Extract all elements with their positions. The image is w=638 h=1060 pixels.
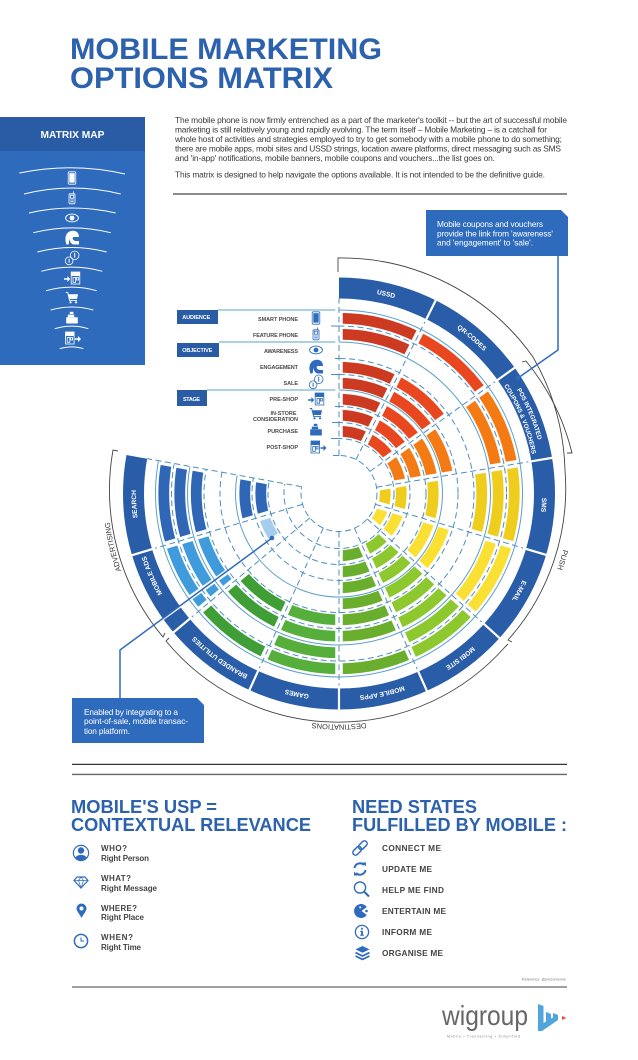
intro text block: whole host of activities and strategies employed to try to get somebody with a mobile phone to do something; <box>174 134 562 144</box>
item: what: WHAT? <box>101 874 131 883</box>
intro text block: marketing is still relatively young and rapidly evolving. The term itself – Mobile Marketing – is a catchall for <box>175 124 547 134</box>
item: connect: CONNECT ME <box>382 843 441 853</box>
item: where: WHERE? <box>101 904 137 913</box>
legend box: audience <box>177 310 218 324</box>
legend: row labels: FEATURE PHONE <box>253 333 298 339</box>
bars: small integrated pieces <box>164 318 514 669</box>
group brackets <box>109 258 572 722</box>
callout: coupons <box>426 210 568 380</box>
legend: row labels <box>253 317 299 451</box>
band label: mobi site: MOBI SITE <box>446 646 476 670</box>
callout text: and 'engagement' to 'sale'. <box>437 238 533 248</box>
panel: matrix map <box>0 117 145 365</box>
legend: row icons <box>308 312 326 453</box>
connector arrow <box>516 256 558 380</box>
item: inform <box>355 925 432 939</box>
callout text: Mobile coupons and vouchers <box>437 219 543 229</box>
legend: row labels: SALE <box>284 381 298 387</box>
item: entertain: ENTERTAIN ME <box>382 906 446 916</box>
legend: row labels: POST-SHOP <box>266 445 298 451</box>
callout text: provide the link from 'awareness' <box>437 228 553 238</box>
callout: point of sale <box>72 536 274 743</box>
title <box>70 33 382 95</box>
section: need states <box>352 796 567 959</box>
item: where: Right Place <box>101 913 145 922</box>
map arcs <box>19 168 125 349</box>
legend box: stage <box>177 390 207 406</box>
item: organise <box>356 946 443 959</box>
legend box: objective: OBJECTIVE <box>182 348 213 354</box>
group label: advertising: ADVERTISING <box>104 522 122 571</box>
heading: NEED STATES <box>352 796 477 817</box>
logo arrow <box>562 1016 566 1020</box>
map icons <box>64 172 81 344</box>
band label: POS integrated: POS INTEGRATED <box>517 388 542 440</box>
logo mark <box>538 1004 558 1031</box>
legend box: objective <box>177 343 219 357</box>
bars: POS coupons <box>164 318 514 669</box>
item: who: Right Person <box>101 854 149 863</box>
title: MOBILE MARKETING <box>70 33 382 66</box>
bars: e-mail <box>164 318 514 669</box>
heading: MOBILE'S USP = <box>71 796 217 817</box>
band label: search: SEARCH <box>131 490 138 518</box>
legend: row labels: PURCHASE <box>268 429 298 435</box>
legend: row labels: AWARENESS <box>264 349 298 355</box>
intro text block <box>174 115 567 180</box>
bars: search <box>164 318 514 669</box>
item: when: WHEN? <box>101 933 133 942</box>
legend: row labels: PRE-SHOP <box>270 397 298 403</box>
bars: USSD <box>164 318 514 669</box>
reference note: Reference: @pwSomeone <box>522 978 566 982</box>
item: when <box>74 933 142 952</box>
legend: row guides and boxes <box>177 310 339 406</box>
callout text: Enabled by integrating to a <box>84 707 178 717</box>
item: update: UPDATE ME <box>382 864 432 874</box>
item: where <box>76 904 145 922</box>
legend: row labels: IN-STORE <box>270 411 297 417</box>
heading <box>352 796 567 835</box>
band label: QR-codes: QR-CODES <box>458 325 486 350</box>
item: update <box>354 862 432 876</box>
heading <box>71 796 311 835</box>
bars: games <box>164 318 514 669</box>
band label: coupons and vouchers: COUPONS & VOUCHERS <box>504 384 536 454</box>
band label: e-mail: E-MAIL <box>512 580 526 600</box>
intro text block: there are mobile apps, mobi sites and USSD strings, location aware platforms, direct messaging such as SMS <box>175 144 561 154</box>
item: when: Right Time <box>101 943 142 952</box>
legend: row labels: CONSIDERATION <box>253 417 298 423</box>
panel heading: MATRIX MAP <box>40 130 105 141</box>
section: mobile's USP <box>71 796 311 952</box>
item: help me find: HELP ME FIND <box>382 885 444 895</box>
callout text <box>437 219 553 248</box>
band label: games: GAMES <box>285 690 308 698</box>
intro text block: This matrix is designed to help navigate the options available. It is not intended to be the definitive guide. <box>175 170 545 180</box>
bar: enabled mobile ads highlight <box>261 415 417 572</box>
intro text block: The mobile phone is now firmly entrenched as a part of the marketer's toolkit -- but the art of successful mobile <box>175 115 567 125</box>
item: inform: INFORM ME <box>382 927 432 937</box>
callout text <box>84 707 188 736</box>
legend box: audience: AUDIENCE <box>182 315 211 321</box>
logo tagline: Mobile • Transacting • Simplified <box>447 1034 520 1038</box>
callout text: point-of-sale, mobile transac- <box>84 716 188 726</box>
item: organise: ORGANISE ME <box>382 948 443 958</box>
band label: branded utilities: BRANDED UTILITIES <box>192 637 248 679</box>
item: who: WHO? <box>101 844 127 853</box>
heading: FULFILLED BY MOBILE : <box>352 814 567 835</box>
band label: mobile ads: MOBILE ADS <box>142 556 162 596</box>
logo wordmark: wigroup <box>441 1000 528 1031</box>
item: entertain <box>354 904 446 918</box>
bars: SMS <box>164 318 514 669</box>
legend: row labels: ENGAGEMENT <box>260 365 299 371</box>
item: who <box>73 844 149 863</box>
legend box: stage: STAGE <box>183 397 200 403</box>
band label: SMS: SMS <box>541 498 546 512</box>
item: connect <box>352 840 441 856</box>
legend: row labels: SMART PHONE <box>258 317 298 323</box>
bars: mobile ads <box>164 318 514 669</box>
bars: QR codes <box>164 318 514 669</box>
logo: wigroup <box>441 1000 566 1038</box>
group label: push: PUSH <box>558 550 568 570</box>
channel bands <box>123 278 555 710</box>
item: help me find <box>354 882 444 896</box>
band label: mobile apps: MOBILE APPS <box>360 686 405 700</box>
heading: CONTEXTUAL RELEVANCE <box>71 814 311 835</box>
title: OPTIONS MATRIX <box>70 62 333 95</box>
intro text block: and 'in-app' notifications, mobile banners, mobile coupons and vouchers...the list goes on. <box>175 153 495 163</box>
chart bars <box>154 305 524 682</box>
bars: branded utilities <box>164 318 514 669</box>
connector arrow <box>120 536 274 698</box>
item: what <box>74 874 158 893</box>
bars: mobi site <box>164 318 514 669</box>
group label: destinations: DESTINATIONS <box>312 723 366 730</box>
callout text: tion platform. <box>84 726 130 736</box>
item: what: Right Message <box>101 884 158 893</box>
band label: USSD: USSD <box>377 290 395 298</box>
radial matrix chart <box>104 278 568 730</box>
bars: mobile apps <box>164 318 514 669</box>
